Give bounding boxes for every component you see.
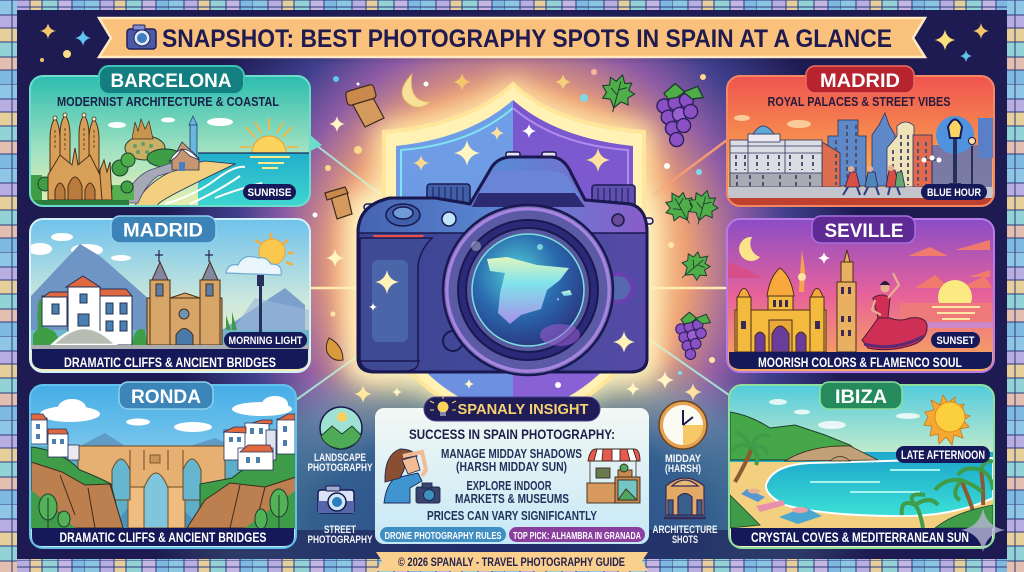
tag: drone rules: DRONE PHOTOGRAPHY RULES (384, 530, 502, 542)
top plate (360, 158, 646, 232)
time tag: blue hour: BLUE HOUR (927, 187, 981, 199)
subtitle: ROYAL PALACES & STREET VIBES (768, 94, 951, 109)
insight tips: MANAGE MIDDAY SHADOWS (441, 446, 582, 461)
scene: Madrid mountains and church (28, 233, 310, 350)
label: architecture: ARCHITECTURE (652, 524, 718, 536)
panel: Ronda (30, 382, 296, 548)
time tag: morning light (224, 332, 307, 348)
scene: Ibiza cove (730, 395, 993, 528)
insight heading: SUCCESS IN SPAIN PHOTOGRAPHY: (409, 426, 615, 442)
scene: Madrid palace and street (728, 113, 993, 206)
icon: wine cork (346, 85, 384, 127)
heading: Seville (812, 216, 915, 243)
tag: top pick (509, 527, 645, 542)
label: street photography: STREET (324, 524, 356, 536)
decorative stars around the title (40, 23, 989, 62)
heading: Madrid: MADRID (123, 220, 203, 242)
illustration: market stall (587, 449, 640, 503)
icon: grapes small (676, 312, 710, 359)
label: street photography: PHOTOGRAPHY (308, 534, 373, 546)
icon: landscape photography (320, 407, 362, 449)
camera and shield glow (345, 76, 660, 436)
caption bar: CRYSTAL COVES & MEDITERRANEAN SUN (751, 530, 969, 545)
heading: Ibiza (820, 382, 902, 409)
strap lugs and top buttons (364, 152, 653, 224)
heading: Madrid (111, 216, 216, 243)
heading: Ronda (119, 382, 213, 409)
icon: clock (659, 401, 707, 449)
footer banner: © 2026 SPANALY - TRAVEL PHOTOGRAPHY GUIDE (398, 555, 625, 569)
insight header (424, 395, 600, 421)
time tag: morning light: MORNING LIGHT (228, 335, 303, 347)
time tag: late afternoon: LATE AFTERNOON (901, 450, 985, 462)
lens (443, 205, 613, 375)
panel: Madrid left (28, 216, 310, 372)
icon: single leaf (673, 245, 717, 289)
heading: Barcelona (99, 66, 244, 94)
icon: street camera (318, 486, 354, 513)
time tag: blue hour (921, 184, 987, 200)
time tag: sunset: SUNSET (936, 335, 975, 347)
time tag: sunrise: SUNRISE (248, 187, 292, 199)
scene: Barcelona coast (31, 113, 310, 206)
control dial (386, 204, 420, 226)
heading: Ronda: RONDA (131, 387, 201, 408)
insight tips: PRICES CAN VARY SIGNIFICANTLY (427, 508, 597, 523)
heading: Seville: SEVILLE (824, 221, 904, 242)
icon: title camera (127, 25, 156, 49)
central camera (358, 152, 653, 375)
icon: Spain map (487, 257, 572, 324)
panel: Ibiza (729, 382, 1005, 552)
caption bar (731, 528, 992, 546)
insight tips: EXPLORE INDOOR (466, 478, 552, 493)
subtitle: MODERNIST ARCHITECTURE & COASTAL (57, 94, 279, 109)
heading: Madrid right (806, 66, 914, 93)
shield (384, 84, 644, 430)
heading: Barcelona: BARCELONA (110, 71, 232, 92)
icon: crescent moon (402, 74, 430, 107)
title banner (99, 18, 925, 57)
camera body (358, 157, 647, 372)
label: landscape photography: LANDSCAPE (314, 452, 366, 464)
red grip strip (373, 235, 424, 243)
caption bar (729, 352, 992, 370)
tag: drone rules (380, 527, 506, 542)
panel: Seville (727, 216, 994, 372)
dancer (862, 273, 927, 350)
icon: second cork (325, 187, 352, 219)
icon: architecture (664, 478, 706, 518)
label: midday: (HARSH) (665, 463, 701, 475)
heading: Madrid right: MADRID (820, 71, 900, 92)
caption bar: MOORISH COLORS & FLAMENCO SOUL (758, 355, 962, 370)
icon: grapes large (657, 84, 703, 147)
grip (360, 238, 432, 371)
time tag: sunrise (243, 184, 296, 200)
insight tips: (HARSH MIDDAY SUN) (456, 459, 567, 474)
label: midday: MIDDAY (665, 453, 702, 465)
caption bar (32, 349, 308, 370)
illustration: photographer (384, 449, 440, 503)
sparkles around camera (312, 69, 715, 403)
tag: top pick: TOP PICK: ALHAMBRA IN GRANADA (513, 530, 641, 542)
dials (427, 184, 635, 207)
label: landscape photography: PHOTOGRAPHY (308, 462, 373, 474)
icon: golden leaf (326, 338, 343, 360)
footer banner (376, 552, 648, 571)
insight tips (427, 446, 597, 523)
time tag: late afternoon (896, 446, 990, 463)
label: architecture: SHOTS (672, 534, 698, 546)
insight tips: MARKETS & MUSEUMS (455, 491, 569, 506)
panel: Barcelona (30, 66, 322, 206)
scene: Seville palace, dancer and sunset (728, 237, 992, 352)
heading: Ibiza: IBIZA (835, 387, 887, 408)
time tag: sunset (931, 332, 980, 348)
caption bar (32, 528, 294, 546)
corner sparkle (961, 508, 1005, 552)
insight header: SPANALY INSIGHT (458, 401, 588, 418)
scene: Ronda bridge and cliffs (31, 396, 296, 530)
title text: SNAPSHOT: BEST PHOTOGRAPHY SPOTS IN SPAIN AT A GLANCE (162, 25, 892, 53)
panel: Madrid right (727, 66, 994, 206)
icon: vine leaf (597, 71, 638, 116)
caption bar: DRAMATIC CLIFFS & ANCIENT BRIDGES (64, 355, 276, 370)
icon: vine leaves pair (659, 186, 722, 231)
caption bar: DRAMATIC CLIFFS & ANCIENT BRIDGES (60, 530, 266, 545)
panel: Spanaly insight (375, 395, 649, 544)
